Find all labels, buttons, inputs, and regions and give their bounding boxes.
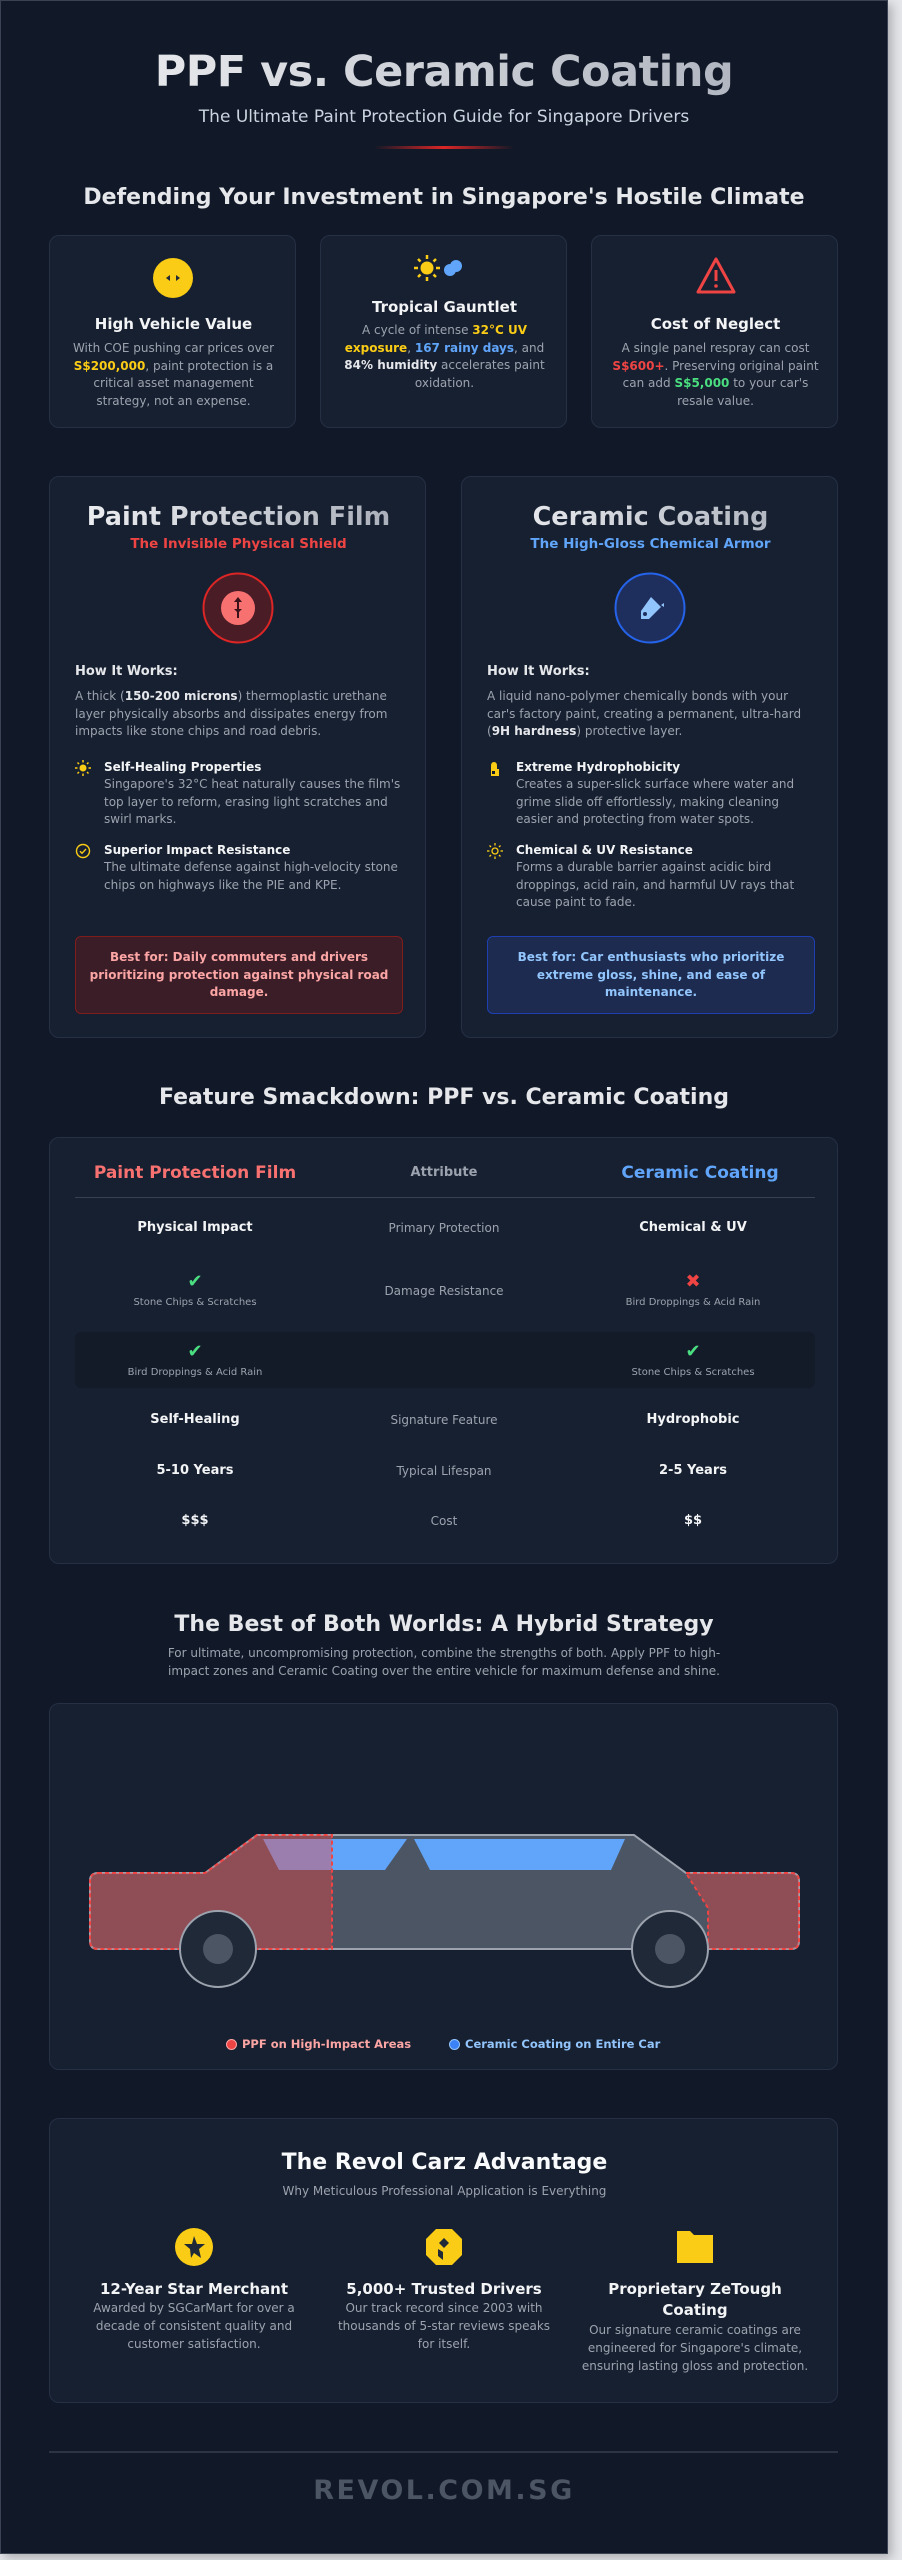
row: cost (181, 1513, 702, 1528)
heading: High Vehicle Value (95, 315, 252, 333)
feature: impact resistance: Superior Impact Resistance (104, 843, 290, 857)
heading: hybrid strategy: The Best of Both Worlds: A Hybrid Strategy (174, 1612, 714, 1637)
item: star merchant: Awarded by SGCarMart for over a decade of consistent quality and customer satisfaction. (93, 2301, 295, 2351)
feature: chemical uv: Chemical & UV Resistance (516, 843, 693, 857)
legend: PPF on High-Impact Areas (242, 2037, 411, 2051)
item: star merchant (93, 2228, 295, 2351)
panel: PPF (49, 476, 426, 1038)
best for box: Best for: Car enthusiasts who prioritize extreme gloss, shine, and ease of maintenance. (518, 950, 784, 999)
row: cost: $$ (684, 1513, 702, 1528)
feature: hydrophobicity (491, 760, 794, 826)
item: zetough coating: Coating (662, 2301, 728, 2319)
item: trusted drivers (338, 2229, 550, 2351)
row: damage resistance: ✔ (187, 1271, 203, 1292)
panel: high vehicle value (49, 235, 296, 428)
comparison table: Attribute (411, 1165, 477, 1180)
row: signature feature (150, 1412, 739, 1427)
row: signature feature: Hydrophobic (647, 1412, 739, 1427)
title (0, 44, 888, 100)
row: lifespan (156, 1463, 727, 1478)
icon: warning (696, 257, 736, 294)
title: PPF vs. Ceramic Coating (155, 47, 733, 97)
row: primary protection: Physical Impact (137, 1220, 253, 1235)
row: highlighted: Stone Chips & Scratches (631, 1367, 755, 1378)
legend: Ceramic Coating on Entire Car (465, 2037, 660, 2051)
icon: shield (202, 572, 274, 644)
panel: revol carz advantage (49, 2118, 838, 2403)
row: lifespan: 5-10 Years (156, 1463, 234, 1478)
heading: Ceramic Coating (533, 502, 768, 532)
panel: cost of neglect (591, 235, 838, 428)
car illustration (89, 1834, 800, 1988)
item: zetough coating (582, 2231, 808, 2373)
row: damage resistance: Bird Droppings & Acid Rain (626, 1297, 760, 1308)
heading: feature smackdown: Feature Smackdown: PPF vs. Ceramic Coating (159, 1085, 729, 1110)
item: zetough coating: Proprietary ZeTough (608, 2280, 782, 2298)
row: signature feature: Self-Healing (150, 1412, 240, 1427)
item: trusted drivers: 5,000+ Trusted Drivers (346, 2280, 542, 2298)
row: damage resistance: ✖ (685, 1271, 701, 1292)
icon: tag (614, 572, 686, 644)
header row: Paint Protection Film (94, 1163, 296, 1183)
icon: sun (75, 760, 91, 776)
feature: chemical uv: Forms a durable barrier against acidic bird droppings, acid rain, and harmful UV rays that cause paint to fade. (516, 860, 794, 909)
heading: defending: Defending Your Investment in Singapore's Hostile Climate (83, 185, 805, 210)
feature: impact resistance: The ultimate defense against high-velocity stone chips on highways like the PIE and KPE. (104, 860, 398, 892)
hybrid description: For ultimate, uncompromising protection, combine the strengths of both. Apply PPF to high-impact zones and Ceramic Coating over the entire vehicle for maximum defense and shine. (168, 1646, 720, 1678)
text: A cycle of intense 32°C UV exposure, 167 rainy days, and 84% humidity accelerates paint oxidation. (344, 323, 545, 390)
row: highlighted: Bird Droppings & Acid Rain (128, 1367, 262, 1378)
item: star merchant: 12-Year Star Merchant (100, 2280, 288, 2298)
heading: The Revol Carz Advantage (282, 2150, 607, 2175)
heading: Cost of Neglect (651, 315, 780, 333)
row: damage resistance (133, 1271, 760, 1308)
how it works heading: How It Works: (487, 664, 590, 679)
heading (462, 500, 839, 534)
panel: tropical gauntlet (320, 235, 567, 428)
icon: folder (677, 2231, 713, 2263)
best for box (487, 936, 815, 1014)
icon: octagon badge (426, 2229, 462, 2265)
row: damage resistance: Damage Resistance (384, 1284, 504, 1298)
item: trusted drivers: Our track record since 2003 with thousands of 5-star reviews speaks for itself. (338, 2301, 550, 2351)
best for box: Best for: Daily commuters and drivers prioritizing protection against physical road damage. (90, 950, 388, 999)
text: With COE pushing car prices over S$200,000, paint protection is a critical asset management strategy, not an expense. (73, 341, 274, 408)
feature: self-healing: Singapore's 32°C heat naturally causes the film's top layer to reform, erasing light scratches and swirl marks. (104, 777, 400, 826)
row: lifespan: 2-5 Years (659, 1463, 727, 1478)
comparison table: Ceramic Coating (621, 1163, 779, 1183)
row: primary protection (137, 1220, 747, 1235)
row: cost: $$$ (181, 1513, 209, 1528)
subheading: The High-Gloss Chemical Armor (530, 536, 771, 552)
how it works text: A liquid nano-polymer chemically bonds with your car's factory paint, creating a permanent, ultra-hard (9H hardness) protective layer. (487, 689, 801, 738)
row: highlighted (75, 1332, 815, 1388)
row: highlighted: ✔ (685, 1341, 701, 1362)
feature: hydrophobicity: Extreme Hydrophobicity (516, 760, 680, 774)
comparison table (49, 1137, 838, 1564)
footer brand: REVOL.COM.SG (313, 2475, 575, 2506)
row: primary protection: Primary Protection (389, 1221, 499, 1235)
feature: impact resistance (76, 843, 398, 892)
panel: car diagram (49, 1703, 838, 2070)
feature: hydrophobicity: Creates a super-slick surface where water and grime slide off effortlessly, making cleaning easier and protecting from water spots. (516, 777, 794, 826)
text: A single panel respray can cost S$600+. Preserving original paint can add S$5,000 to your car's resale value. (612, 341, 819, 408)
row: signature feature: Signature Feature (390, 1413, 498, 1427)
icon: coin (153, 258, 193, 298)
best for box (75, 936, 403, 1014)
icon: sun and cloud (414, 255, 462, 281)
feature: self-healing: Self-Healing Properties (104, 760, 261, 774)
panel: ceramic coating (461, 476, 838, 1038)
divider (49, 2451, 838, 2453)
item: zetough coating: Our signature ceramic coatings are engineered for Singapore's climate, ensuring lasting gloss and protection. (582, 2323, 808, 2373)
legend (226, 2037, 660, 2051)
icon: sun outline (487, 843, 503, 859)
row: lifespan: Typical Lifespan (396, 1464, 492, 1478)
feature: self-healing (75, 760, 400, 826)
red accent line (374, 146, 514, 149)
heading: Paint Protection Film (87, 502, 390, 532)
row: damage resistance: Stone Chips & Scratches (133, 1297, 257, 1308)
heading: Tropical Gauntlet (372, 298, 517, 316)
subheading: Why Meticulous Professional Application is Everything (283, 2184, 606, 2198)
how it works text: A thick (150-200 microns) thermoplastic urethane layer physically absorbs and dissipates energy from impacts like stone chips and road debris. (75, 689, 387, 738)
row: highlighted: ✔ (187, 1341, 203, 1362)
icon: hand (491, 762, 499, 776)
subtitle: The Ultimate Paint Protection Guide for Singapore Drivers (199, 107, 689, 127)
icon: check circle (76, 844, 90, 858)
row: primary protection: Chemical & UV (639, 1220, 747, 1235)
feature: chemical uv (487, 843, 794, 909)
subheading: The Invisible Physical Shield (130, 536, 347, 552)
icon: star badge (175, 2228, 213, 2266)
row: cost: Cost (431, 1514, 457, 1528)
how it works heading: How It Works: (75, 664, 178, 679)
